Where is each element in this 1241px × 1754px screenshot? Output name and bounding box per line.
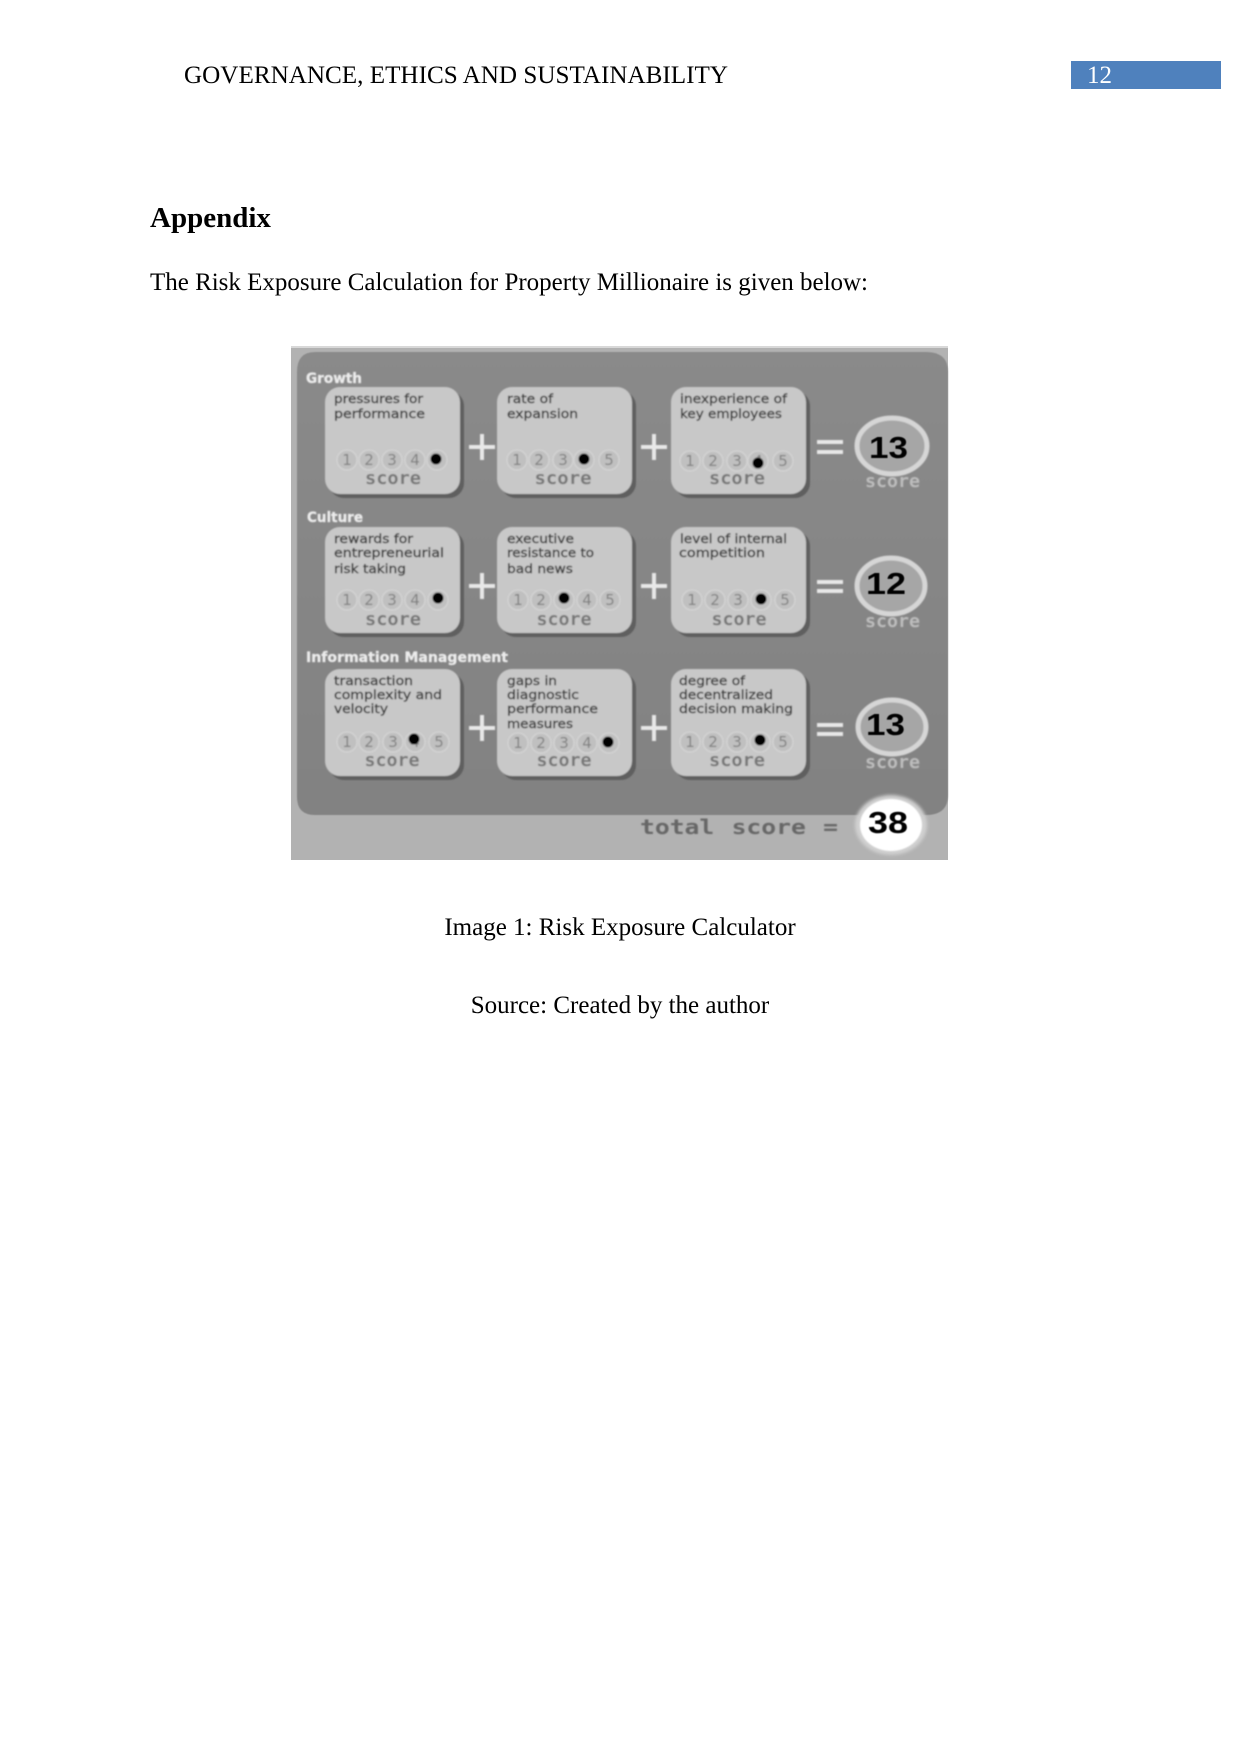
card: degree of decentralized decision making: 5 <box>778 733 788 751</box>
card: executive resistance to bad news <box>497 527 636 637</box>
card: rate of expansion: rate of <box>507 391 554 406</box>
source line: Source: Created by the author <box>471 992 770 1019</box>
card: gaps in diagnostic performance measures <box>497 669 636 780</box>
information management score 13: 13 <box>866 707 905 742</box>
card: transaction complexity and velocity: 5 <box>434 733 444 751</box>
card: degree of decentralized decision making: score <box>709 750 765 771</box>
card: executive resistance to bad news: 1 <box>513 591 523 609</box>
culture score 12: score <box>865 611 920 632</box>
card: transaction complexity and velocity: 1 <box>342 733 352 751</box>
card: rewards for entrepreneurial risk taking: 1 <box>342 591 352 609</box>
card: degree of decentralized decision making: 1 <box>685 733 695 751</box>
plus operator <box>641 573 667 599</box>
card: inexperience of key employees: key employees <box>680 406 782 421</box>
calculator background <box>291 346 948 860</box>
card: rewards for entrepreneurial risk taking <box>325 527 464 637</box>
card: pressures for performance: performance <box>334 406 425 421</box>
card: gaps in diagnostic performance measures: gaps in <box>507 673 557 688</box>
card: rewards for entrepreneurial risk taking: 2 <box>364 591 374 609</box>
card: rate of expansion: 3 <box>558 451 568 469</box>
card: rate of expansion: 2 <box>534 451 544 469</box>
card: inexperience of key employees: inexperience of <box>680 391 788 406</box>
information management score 13 <box>858 700 926 773</box>
card: inexperience of key employees: 3 <box>732 452 742 470</box>
card: executive resistance to bad news: bad news <box>507 561 573 576</box>
card: pressures for performance: 2 <box>364 451 374 469</box>
card: transaction complexity and velocity: 2 <box>364 733 374 751</box>
section label: Growth: Growth <box>306 371 362 387</box>
equals operator <box>817 725 843 734</box>
card: rewards for entrepreneurial risk taking: entrepreneurial <box>334 545 444 560</box>
section label: Information Management: Information Management <box>306 650 508 666</box>
information management score 13: score <box>865 752 920 773</box>
card: inexperience of key employees: 1 <box>685 452 695 470</box>
plus operator <box>469 434 495 460</box>
card: inexperience of key employees: score <box>709 468 765 489</box>
card: transaction complexity and velocity: 4 <box>410 733 420 751</box>
card: level of internal competition: competition <box>679 545 765 560</box>
card: gaps in diagnostic performance measures: diagnostic <box>507 687 579 702</box>
card: pressures for performance <box>325 387 464 498</box>
plus operator <box>469 715 495 741</box>
heading: Appendix: Appendix <box>150 202 271 234</box>
card: transaction complexity and velocity: score <box>364 750 420 771</box>
card: inexperience of key employees <box>671 387 810 498</box>
card: rate of expansion: 5 <box>604 451 614 469</box>
card: inexperience of key employees: 5 <box>778 452 788 470</box>
card: executive resistance to bad news: 4 <box>582 591 592 609</box>
card: degree of decentralized decision making: 2 <box>708 733 718 751</box>
running header title: GOVERNANCE, ETHICS AND SUSTAINABILITY <box>184 62 728 89</box>
card: gaps in diagnostic performance measures: 1 <box>513 734 523 752</box>
card: rewards for entrepreneurial risk taking: risk taking <box>334 561 406 576</box>
card: gaps in diagnostic performance measures: score <box>536 750 592 771</box>
card: gaps in diagnostic performance measures: 4 <box>582 734 592 752</box>
equals operator <box>817 442 843 452</box>
card: rewards for entrepreneurial risk taking: 4 <box>410 591 420 609</box>
growth score 13 <box>857 418 927 492</box>
card: level of internal competition: 1 <box>687 591 697 609</box>
total score 38 <box>855 795 927 855</box>
plus operator <box>469 573 495 599</box>
card: level of internal competition <box>671 527 810 637</box>
card: level of internal competition: 3 <box>733 591 743 609</box>
section label: Culture: Culture <box>307 510 363 526</box>
culture score 12 <box>857 558 925 632</box>
card: transaction complexity and velocity: transaction <box>334 673 413 688</box>
card: executive resistance to bad news: score <box>536 609 592 630</box>
total score label: total score = <box>640 815 838 839</box>
card: degree of decentralized decision making <box>671 669 810 780</box>
card: pressures for performance: pressures for <box>334 391 424 406</box>
card: inexperience of key employees: 4 <box>753 452 763 470</box>
card: degree of decentralized decision making: decision making <box>679 701 793 716</box>
growth score 13: score <box>865 471 920 492</box>
card: level of internal competition: level of internal <box>680 531 787 546</box>
risk exposure calculator image <box>291 346 948 860</box>
card: inexperience of key employees: 2 <box>708 452 718 470</box>
growth score 13: 13 <box>869 430 908 465</box>
card: pressures for performance: score <box>365 468 421 489</box>
card: rewards for entrepreneurial risk taking: score <box>365 609 421 630</box>
card: level of internal competition: score <box>712 609 767 630</box>
card: pressures for performance: 1 <box>342 451 352 469</box>
card: degree of decentralized decision making: decentralized <box>679 687 773 702</box>
card: transaction complexity and velocity: velocity <box>334 701 389 716</box>
card: gaps in diagnostic performance measures: 3 <box>559 734 569 752</box>
intro sentence: The Risk Exposure Calculation for Property Millionaire is given below: <box>150 269 868 296</box>
card: rate of expansion: 1 <box>512 451 522 469</box>
page number badge: 12 <box>1087 62 1112 89</box>
card: executive resistance to bad news: 5 <box>605 591 615 609</box>
card: degree of decentralized decision making: 3 <box>732 733 742 751</box>
card: rate of expansion: expansion <box>507 406 578 421</box>
card: executive resistance to bad news: executive <box>507 531 574 546</box>
card: degree of decentralized decision making: degree of <box>679 673 746 688</box>
card: executive resistance to bad news: resistance to <box>507 545 594 560</box>
card: executive resistance to bad news: 2 <box>536 591 546 609</box>
card: level of internal competition: 2 <box>710 591 720 609</box>
plus operator <box>641 434 667 460</box>
card: level of internal competition: 5 <box>780 591 790 609</box>
card: pressures for performance: 4 <box>410 451 420 469</box>
card: transaction complexity and velocity: 3 <box>388 733 398 751</box>
card: rewards for entrepreneurial risk taking: 3 <box>387 591 397 609</box>
card: rate of expansion <box>497 387 636 498</box>
total score 38: 38 <box>868 805 908 840</box>
plus operator <box>641 715 667 741</box>
card: gaps in diagnostic performance measures: measures <box>507 716 573 731</box>
card: pressures for performance: 3 <box>387 451 397 469</box>
card: rewards for entrepreneurial risk taking: rewards for <box>334 531 414 546</box>
caption: Image 1: Image 1: Risk Exposure Calculator <box>444 914 796 941</box>
culture score 12: 12 <box>866 566 906 601</box>
card: gaps in diagnostic performance measures: performance <box>507 701 598 716</box>
card: rate of expansion: score <box>534 468 592 489</box>
card: gaps in diagnostic performance measures: 2 <box>536 734 546 752</box>
card: transaction complexity and velocity: complexity and <box>334 687 442 702</box>
page number badge <box>1071 61 1221 89</box>
card: transaction complexity and velocity <box>325 669 464 780</box>
equals operator <box>817 582 843 591</box>
